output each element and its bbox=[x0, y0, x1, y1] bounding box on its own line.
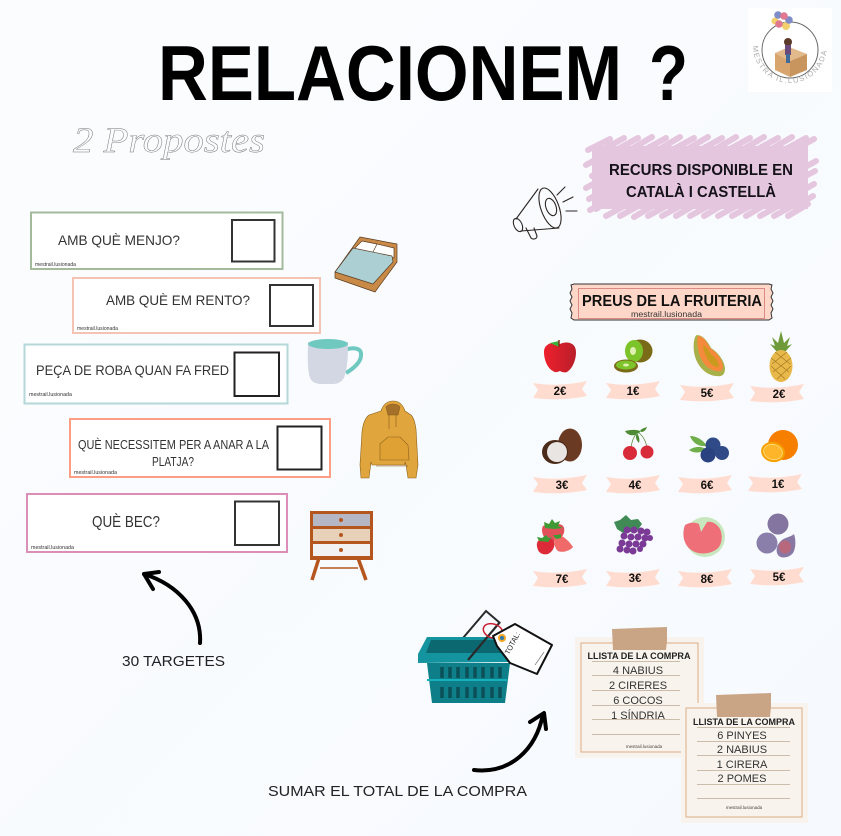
card: peça de roba bbox=[24, 344, 288, 404]
card: què necessitem: PLATJA? bbox=[152, 455, 194, 469]
price: 1 euro bbox=[748, 474, 802, 492]
price: 3 euros: 3€ bbox=[629, 573, 642, 585]
title: ? bbox=[649, 29, 688, 117]
price: 5 euros bbox=[750, 567, 804, 585]
fruit: strawberries bbox=[537, 519, 573, 554]
label: sumar el total: SUMAR EL TOTAL DE LA COMPRA bbox=[268, 783, 527, 800]
shopping list 2: 6 PINYES bbox=[717, 730, 767, 742]
card: amb què em rento: mestrail.lusionada bbox=[77, 326, 118, 332]
shopping list 2: mestrail.lusionada bbox=[726, 805, 763, 810]
price: 7 euros: 7€ bbox=[556, 574, 569, 586]
icon: shopping basket with total tag: TOTAL: bbox=[503, 631, 522, 656]
fruit: grapes bbox=[614, 515, 653, 554]
callout: recurs disponible: CATALÀ I CASTELLÀ bbox=[626, 184, 776, 201]
card: què necessitem: mestrail.lusionada bbox=[74, 470, 117, 476]
icon: hoodie bbox=[360, 401, 418, 478]
label: 30 targetes: 30 TARGETES bbox=[122, 653, 225, 670]
fruit: kiwi bbox=[614, 340, 652, 372]
price: 3 euros bbox=[606, 569, 660, 587]
fruit: papaya bbox=[694, 335, 725, 376]
shopping list 1: 6 COCOS bbox=[613, 695, 663, 707]
logo: mestra il·lusionada bbox=[753, 11, 827, 83]
price: 2 euros: 2€ bbox=[773, 389, 786, 401]
price: 3 euros bbox=[533, 475, 587, 493]
shopping list 2: LLISTA DE LA COMPRA bbox=[693, 717, 795, 728]
shopping list 2: 1 CIRERA bbox=[717, 759, 768, 771]
fruit: figs bbox=[756, 514, 795, 557]
shopping list 2: 2 POMES bbox=[718, 773, 766, 785]
shopping list 2: 2 NABIUS bbox=[717, 744, 767, 756]
callout: recurs disponible bbox=[586, 137, 816, 217]
price header bbox=[570, 284, 773, 320]
card: amb què menjo: mestrail.lusionada bbox=[35, 262, 76, 268]
shopping list 1: 2 CIRERES bbox=[609, 680, 667, 692]
card: amb què em rento bbox=[73, 278, 320, 333]
title: RELACIONEM bbox=[158, 29, 622, 117]
price header: PREUS DE LA FRUITERIA bbox=[582, 293, 762, 310]
fruit: blueberries bbox=[689, 436, 729, 462]
subtitle: 2 Propostes: 2 Propostes bbox=[73, 120, 265, 160]
fruit: coconut bbox=[542, 428, 582, 464]
price: 1 euro: 1€ bbox=[772, 479, 785, 491]
price: 2 euros bbox=[533, 381, 587, 399]
shopping list 1: 4 NABIUS bbox=[613, 665, 663, 677]
fruit: orange bbox=[759, 430, 798, 465]
card: peça de roba: PEÇA DE ROBA QUAN FA FRED bbox=[36, 362, 229, 378]
card: què necessitem: QUÈ NECESSITEM PER A ANAR A LA bbox=[78, 437, 270, 452]
icon: bed bbox=[335, 237, 397, 292]
card: què necessitem bbox=[70, 419, 330, 477]
price: 4 euros bbox=[606, 475, 660, 493]
shopping list 1 bbox=[575, 627, 704, 758]
price: 8 euros bbox=[678, 569, 732, 587]
price: 5 euros: 5€ bbox=[701, 388, 714, 400]
shopping list 1: 1 SÍNDRIA bbox=[611, 709, 666, 722]
fruit: apple bbox=[544, 340, 576, 372]
card: què bec: QUÈ BEC? bbox=[92, 514, 160, 531]
icon: shopping basket with total tag bbox=[418, 611, 552, 703]
price header: mestrail.lusionada bbox=[631, 310, 703, 319]
card: amb què menjo bbox=[31, 212, 282, 269]
price: 4 euros: 4€ bbox=[629, 480, 642, 492]
price: 8 euros: 8€ bbox=[701, 574, 714, 586]
icon: nightstand bbox=[310, 511, 373, 580]
fruit: cherries bbox=[623, 427, 654, 460]
price: 6 euros: 6€ bbox=[701, 480, 714, 492]
card: amb què menjo: AMB QUÈ MENJO? bbox=[58, 232, 180, 248]
shopping list 2 bbox=[681, 693, 808, 823]
logo: mestra il·lusionada: MESTRA IL.LUSIONADA bbox=[753, 46, 827, 83]
price: 1 euro: 1€ bbox=[627, 386, 640, 398]
price: 2 euros: 2€ bbox=[554, 386, 567, 398]
price: 1 euro bbox=[606, 381, 660, 399]
callout: recurs disponible: RECURS DISPONIBLE EN bbox=[609, 162, 793, 179]
price: 5 euros bbox=[680, 383, 734, 401]
card: peça de roba: mestrail.lusionada bbox=[29, 392, 72, 398]
price: 3 euros: 3€ bbox=[556, 480, 569, 492]
icon: megaphone bbox=[511, 185, 577, 239]
fruit: watermelon bbox=[683, 517, 725, 557]
card: què bec bbox=[27, 494, 287, 552]
arrow: sumar el total bbox=[474, 713, 546, 770]
card: amb què em rento: AMB QUÈ EM RENTO? bbox=[106, 292, 250, 308]
price: 6 euros bbox=[678, 475, 732, 493]
fruit: pineapple bbox=[770, 331, 792, 382]
price: 2 euros bbox=[750, 384, 804, 402]
shopping list 1: LLISTA DE LA COMPRA bbox=[588, 651, 691, 662]
shopping list 1: mestrail.lusionada bbox=[626, 744, 663, 749]
arrow: 30 targetes bbox=[144, 572, 200, 643]
card: què bec: mestrail.lusionada bbox=[31, 545, 74, 551]
price: 5 euros: 5€ bbox=[773, 572, 786, 584]
icon: mug bbox=[308, 339, 361, 384]
price: 7 euros bbox=[533, 569, 587, 587]
